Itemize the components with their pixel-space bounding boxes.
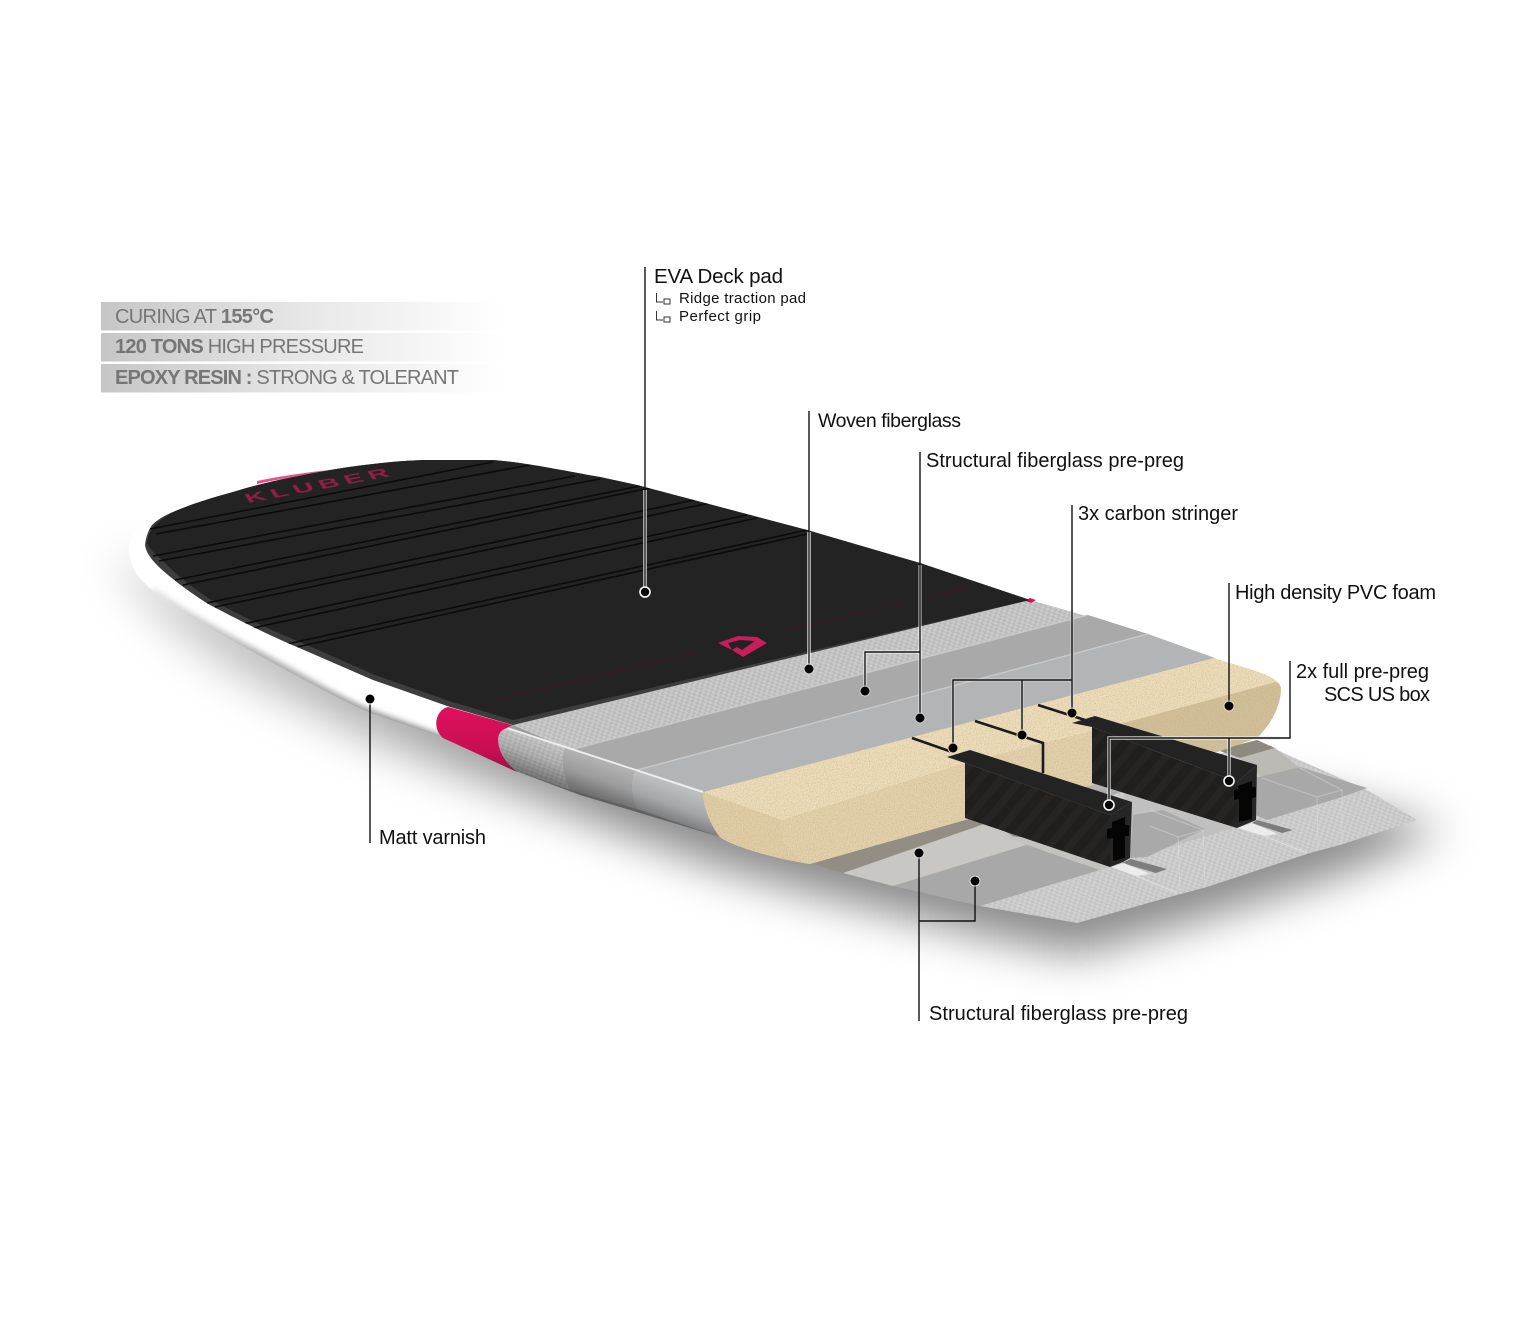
pad corner pink tip bbox=[1026, 598, 1036, 603]
deck band: woven fiberglass bbox=[513, 600, 1090, 750]
callout: carbon stringer: 3x carbon stringer bbox=[1078, 503, 1238, 525]
callout: carbon stringer bbox=[948, 503, 1238, 753]
callout: EVA deck pad: Perfect grip bbox=[679, 308, 761, 325]
bar: curing bbox=[101, 302, 501, 330]
ridge lines bbox=[150, 462, 807, 647]
callout: woven fiberglass: Woven fiberglass bbox=[818, 410, 961, 432]
board illustration bbox=[129, 460, 1417, 923]
process info panel bbox=[101, 302, 501, 392]
foam core bbox=[703, 658, 1281, 864]
stringer: rear US box bbox=[1072, 716, 1307, 853]
deck band: structural pre-preg bbox=[570, 615, 1148, 770]
callout: matt varnish bbox=[365, 694, 486, 849]
callout: woven fiberglass bbox=[804, 410, 961, 674]
callout: SCS US box: 2x full pre-preg bbox=[1296, 661, 1429, 683]
EVA deck pad bbox=[145, 460, 1030, 725]
callout: matt varnish: Matt varnish bbox=[379, 827, 486, 849]
callout: EVA deck pad: EVA Deck pad bbox=[654, 265, 783, 288]
foam stringer slits bbox=[912, 705, 1085, 773]
callout: high density PVC foam: High density PVC foam bbox=[1235, 582, 1436, 604]
rail: matt varnish bbox=[130, 550, 512, 738]
stringer: front US box bbox=[947, 750, 1177, 893]
bar: pressure bbox=[101, 333, 501, 362]
bottom fiberglass layers bbox=[810, 740, 1417, 923]
callout: structural fiberglass pre-preg bottom bbox=[914, 848, 1188, 1025]
dark pink pinstripes bbox=[497, 589, 965, 700]
rail: pink stripe bbox=[436, 707, 517, 772]
pad side edge bbox=[145, 460, 1030, 725]
callout: EVA deck pad bbox=[640, 265, 806, 597]
pink nose sliver bbox=[257, 470, 327, 484]
bar: pressure: 120 TONS HIGH PRESSURE bbox=[115, 336, 364, 358]
bar: resin bbox=[101, 364, 501, 392]
drop shadow under board bbox=[116, 555, 1445, 955]
band highlight lines bbox=[570, 615, 1148, 770]
rail: carbon section bbox=[498, 728, 720, 837]
icon: brand logo bbox=[718, 636, 767, 657]
callout: SCS US box bbox=[1104, 661, 1430, 810]
pad top surface bbox=[147, 460, 1030, 720]
callout: high density PVC foam bbox=[1224, 582, 1436, 711]
callout: SCS US box: SCS US box bbox=[1324, 684, 1430, 706]
bar: curing: CURING AT 155°C bbox=[115, 306, 274, 328]
translucent box outlines bbox=[1150, 768, 1342, 893]
bar: resin: EPOXY RESIN : STRONG & TOLERANT bbox=[115, 367, 459, 389]
callout: EVA deck pad: Ridge traction pad bbox=[679, 290, 806, 307]
icon: sub-item branch bbox=[656, 293, 670, 322]
callout: structural fiberglass pre-preg top bbox=[860, 450, 1184, 723]
deck band: light pre-preg bbox=[637, 634, 1215, 792]
callout: structural fiberglass pre-preg top: Structural fiberglass pre-preg bbox=[926, 450, 1184, 472]
callout: structural fiberglass pre-preg bottom: Structural fiberglass pre-preg bbox=[929, 1003, 1188, 1025]
brand text on pad: KLUBER bbox=[241, 464, 398, 506]
